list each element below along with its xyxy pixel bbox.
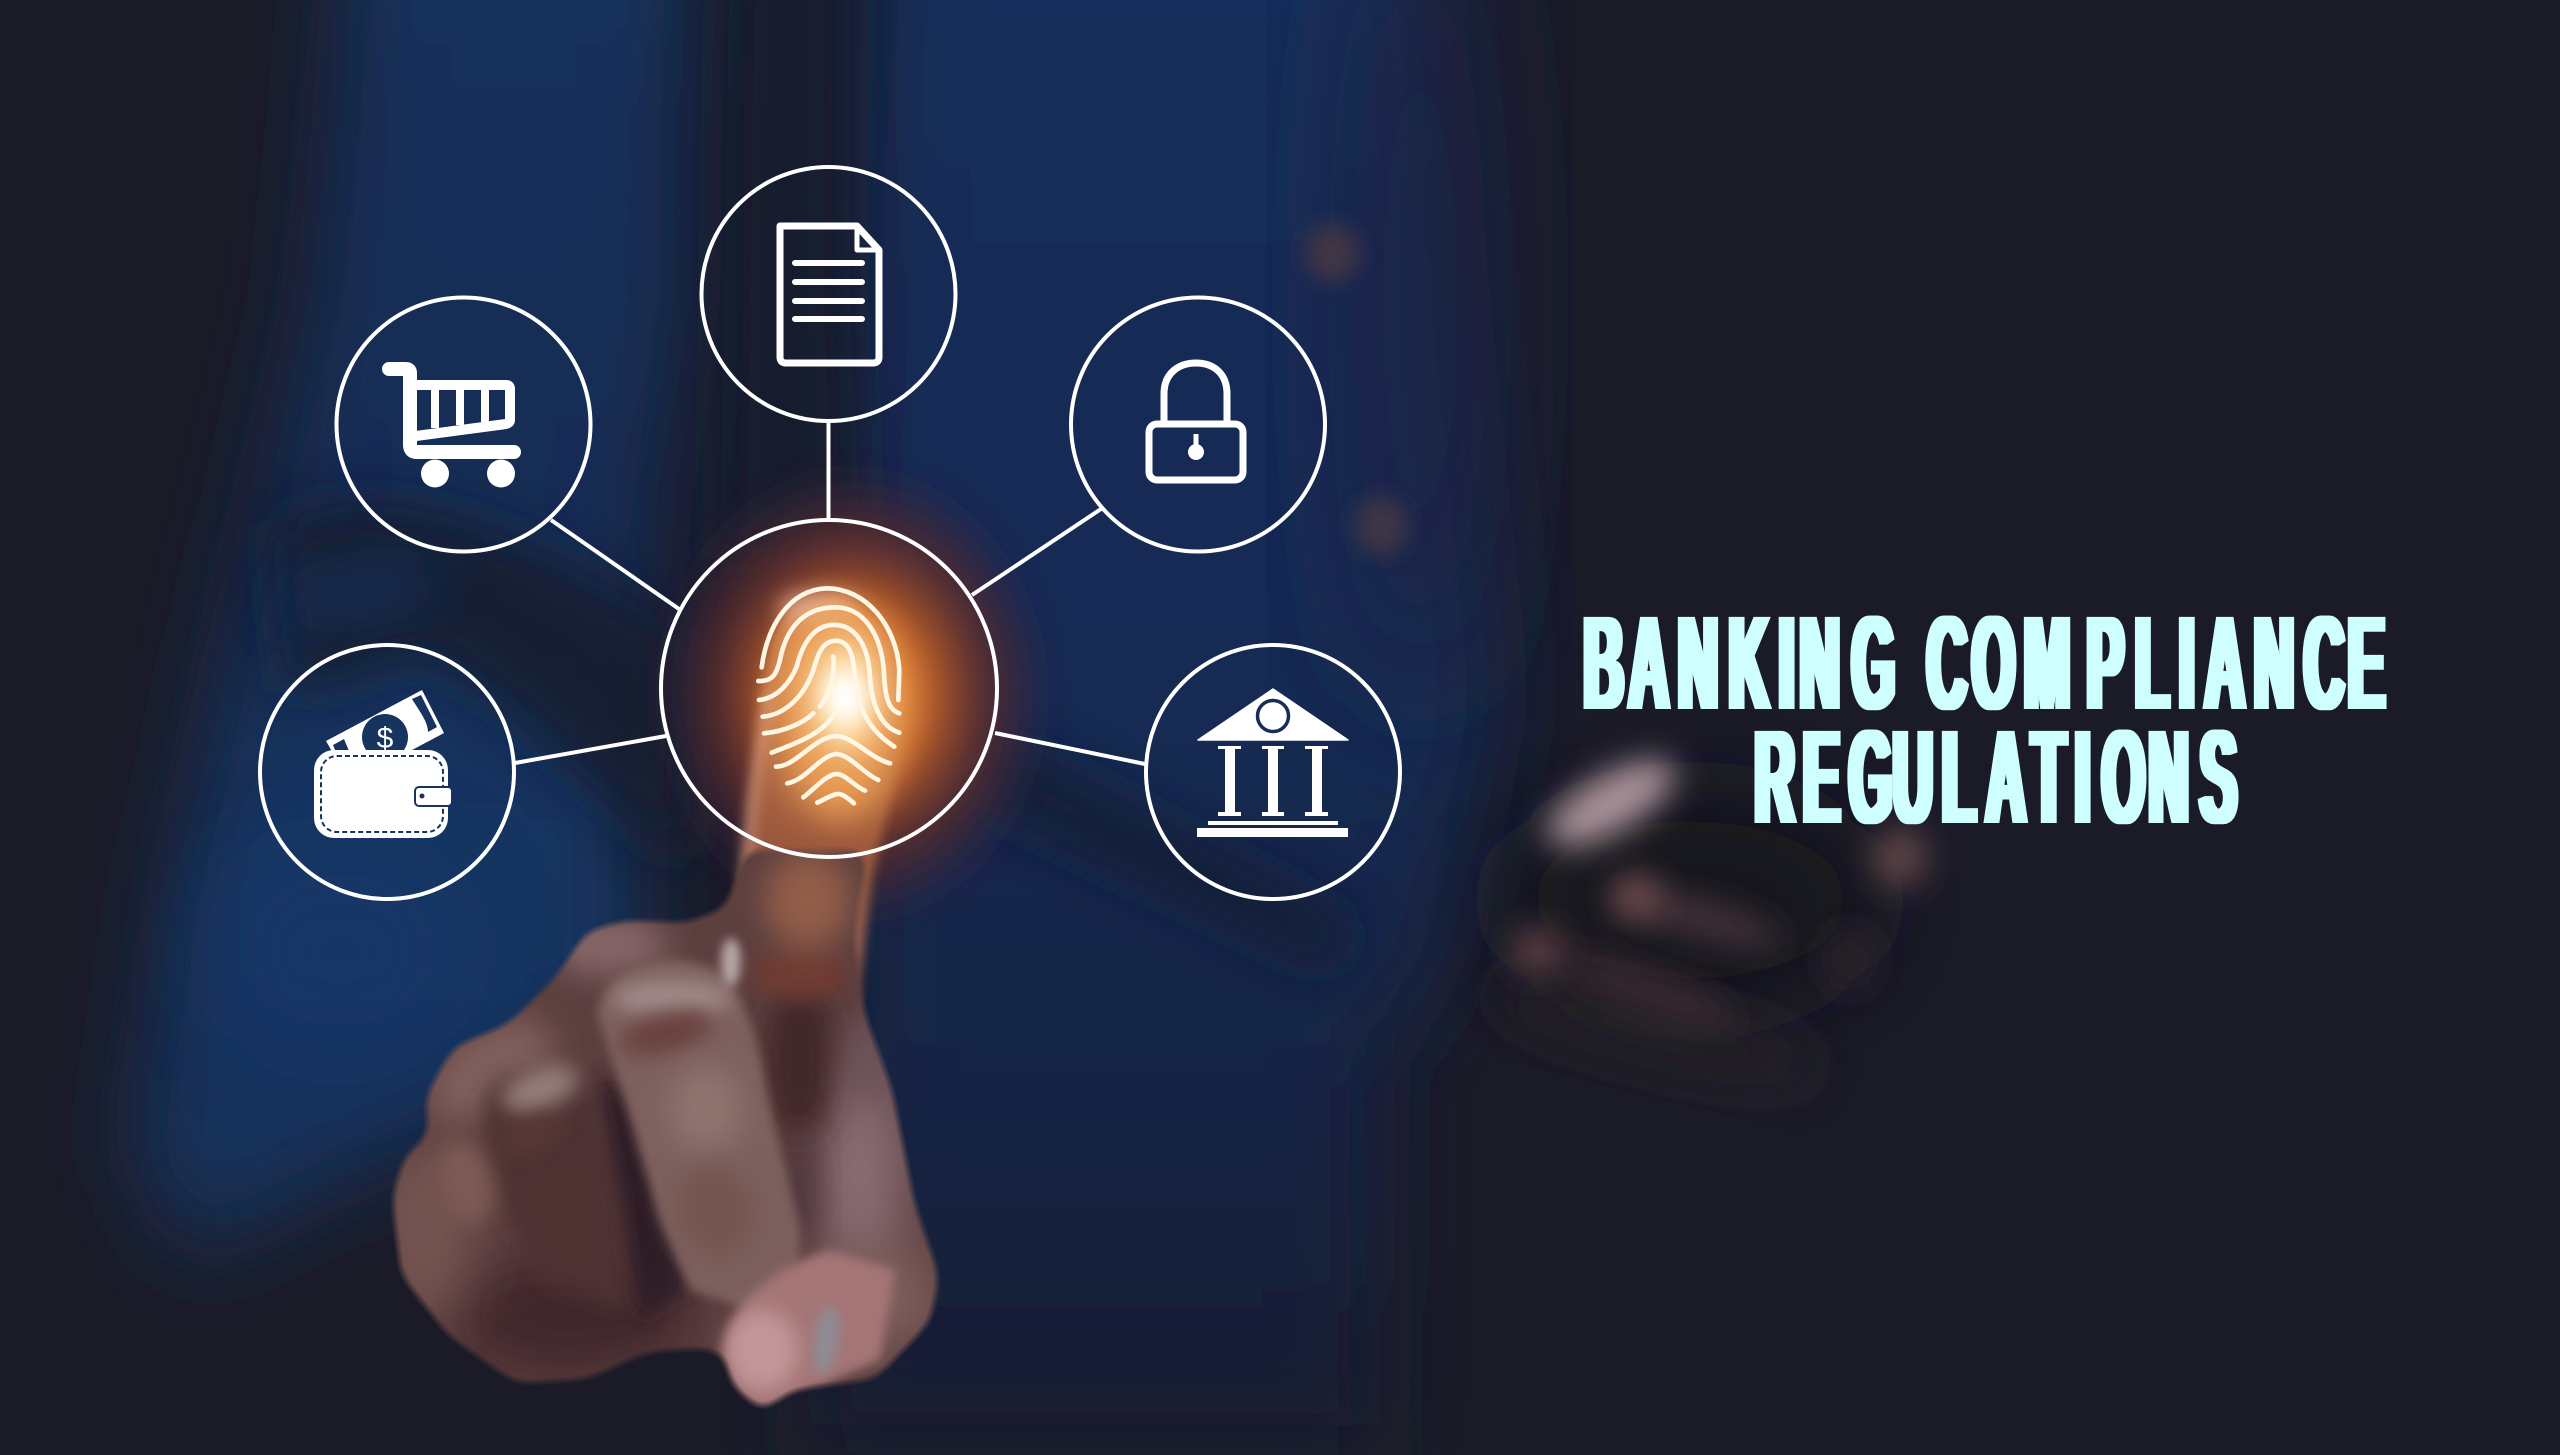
node: padlock [1071, 298, 1325, 552]
gap between fingers [596, 1075, 690, 1320]
finger left edge light [745, 690, 770, 880]
fingertip highlight [778, 592, 858, 624]
torso fold [980, 740, 1360, 970]
node: shopping cart [336, 298, 590, 552]
little finger [438, 1139, 502, 1224]
dark gap between arm and torso [720, 0, 860, 560]
fingerprint [758, 588, 899, 803]
hand photo [390, 847, 940, 1409]
ring finger [484, 1069, 630, 1310]
central glow yellow [811, 641, 879, 753]
title: REGULATIONS [1755, 701, 2237, 852]
icon: document [780, 226, 879, 363]
torso right shading [1350, 0, 1490, 720]
icon: wallet with banknote [314, 690, 452, 838]
blurred second hand holding phone [1483, 743, 1927, 1100]
node: wallet [260, 645, 514, 899]
blue torso [800, 0, 1500, 1455]
title: BANKING COMPLIANCE [1584, 587, 2385, 738]
glow core [825, 671, 865, 723]
icon: padlock [1149, 363, 1243, 480]
icon: cart [389, 369, 515, 488]
title [1584, 587, 2385, 852]
central glow orange [778, 600, 902, 820]
central fingerprint circle [661, 520, 997, 857]
bright lower sleeve [210, 840, 470, 1060]
glow behind central circle [657, 465, 1047, 925]
icon: wallet with banknote: $ [377, 722, 394, 755]
dark sleeve fold [270, 505, 690, 870]
middle finger [597, 960, 800, 1310]
index finger [736, 601, 899, 1010]
finger base [752, 951, 848, 999]
connector lines [515, 421, 1145, 764]
thumb [724, 1250, 895, 1412]
shirt buttons [1305, 224, 1408, 555]
icon: bank building [1197, 689, 1348, 837]
node: bank [1146, 645, 1400, 899]
node: document [702, 167, 956, 421]
blue sleeve [130, 0, 695, 1260]
small bright sleeve band [272, 554, 448, 626]
